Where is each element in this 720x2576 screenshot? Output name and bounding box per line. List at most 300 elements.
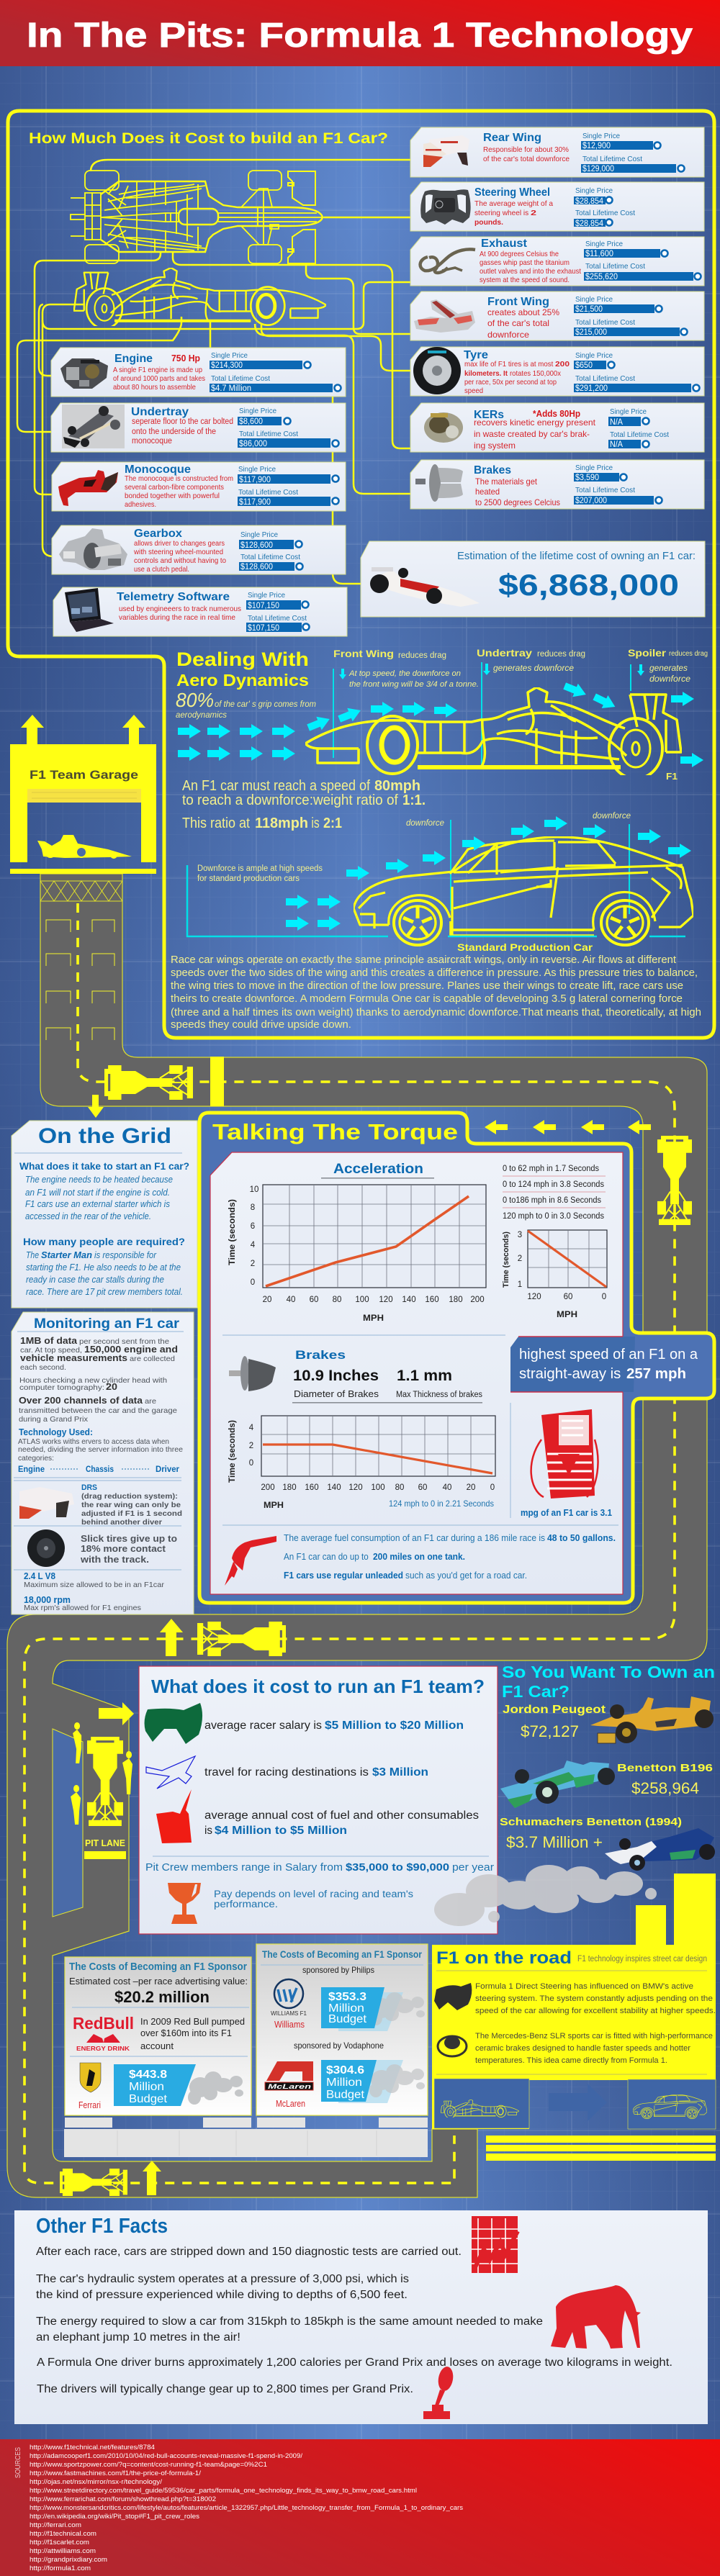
text: slick tires: Slick tires give up to — [81, 1534, 177, 1544]
chart: acceleration line chart: 4 — [251, 1241, 256, 1249]
diagram: standard production car — [354, 837, 693, 945]
icon: black steering wheel — [434, 1983, 472, 2010]
text: undertray description: monocoque — [132, 437, 172, 446]
car: Jordon Peugeot: $72,127 — [521, 1722, 579, 1740]
metric: telemetry prices: Single Price — [248, 591, 285, 600]
title banner: In The Pits: Formula 1 Technology — [27, 17, 693, 55]
chart: brakes line chart: 0 — [490, 1483, 495, 1492]
text: data channels: are — [145, 1397, 156, 1406]
chart: brakes line chart: 60 — [418, 1483, 427, 1492]
text: downforce ample: for standard production cars — [197, 875, 300, 883]
text: technology used: categories: — [18, 1454, 54, 1463]
metric: gearbox prices — [239, 530, 302, 571]
chart: brakes line chart: 180 — [282, 1483, 297, 1492]
panel: exhaust — [410, 237, 704, 286]
text: rear wing description: Responsible for about 30% — [483, 145, 569, 154]
chart: brakes line chart: Time (seconds) — [227, 1420, 237, 1483]
text: ceramic brakes — [475, 2032, 713, 2065]
text: tomography hours — [19, 1376, 167, 1392]
question: starting an F1 car: F1 cars use an external starter which is — [25, 1198, 170, 1209]
icon: green steering wheel — [145, 1703, 202, 1744]
text: brake specs: Diameter of Brakes — [294, 1388, 379, 1399]
figure: Williams budget: $353.3 — [328, 1991, 366, 2003]
list: source links: http://ojas.net/nsx/mirror/nsx-r/technology/ — [30, 2478, 162, 2485]
car: Schumachers Benetton — [500, 1816, 715, 1871]
figure: Ferrari budget: Million — [129, 2081, 164, 2093]
label: spoiler — [628, 648, 708, 684]
text: monocoque description — [125, 474, 233, 509]
label: sponsored by Philips: sponsored by Philips — [302, 1965, 374, 1975]
text: red bull spend: over $160m into its F1 — [140, 2028, 232, 2038]
metric: steering wheel prices — [574, 186, 635, 228]
metric: monocoque prices: $117,900 — [239, 498, 271, 507]
icon: laptop — [65, 588, 114, 632]
metric: telemetry prices — [246, 591, 310, 633]
callout: adds 80Hp: *Adds 80Hp — [533, 409, 580, 419]
text: wings paragraph: speeds over the two sides of the wing and this creates a difference in pressure. As this pressure tries to balance, — [171, 967, 698, 979]
icon: gear stick — [423, 2366, 455, 2419]
text: data volume: 1MB of data — [20, 1335, 78, 1346]
heading: so you want to own — [502, 1663, 715, 1701]
heading: so you want to own: F1 Car? — [502, 1682, 570, 1701]
text: engine description — [113, 366, 205, 392]
metric: front wing prices: $215,000 — [575, 328, 607, 337]
metric: undertray prices: Single Price — [239, 407, 276, 415]
metric: KERs prices: N/A — [610, 418, 623, 427]
decorative stripes — [486, 2136, 716, 2161]
heading: talking the torque: Talking The Torque — [212, 1119, 458, 1144]
logo: Ferrari: Ferrari — [78, 2100, 101, 2110]
callout: 750 Hp: 750 Hp — [171, 353, 200, 363]
heading: gearbox: Gearbox — [134, 528, 182, 540]
text: DRS: (drag reduction system): — [81, 1492, 178, 1501]
text: red bull spend: In 2009 Red Bull pumped — [140, 2016, 245, 2027]
labels: downforce: downforce — [593, 812, 631, 821]
road track — [7, 874, 707, 2197]
text: technology used: Driver — [156, 1464, 179, 1474]
metric: engine prices: $4.7 Million — [211, 384, 251, 393]
text: mpg: mpg of an F1 car is 3.1 — [521, 1507, 612, 1518]
text: fuel facts: An F1 car can do up to — [284, 1551, 371, 1562]
car: Schumachers Benetton: $3.7 Million + — [506, 1833, 603, 1851]
question: starting an F1 car — [19, 1160, 189, 1221]
panel: other F1 facts — [14, 2210, 708, 2424]
metric: engine prices: Total Lifetime Cost — [211, 374, 270, 383]
label: pit lane — [84, 1838, 126, 1859]
text: exhaust description: outlet valves and into the exhaust — [480, 267, 581, 276]
metric: monocoque prices: Total Lifetime Cost — [238, 488, 298, 497]
text: monocoque description: bonded together with powerful — [125, 492, 220, 500]
text: tomography hours: Hours checking a new cylinder head with — [19, 1376, 167, 1385]
icon: car on main straight — [104, 1065, 193, 1100]
text: gearbox description: use a clutch pedal. — [134, 565, 189, 574]
panel: monitoring an F1 car — [12, 1312, 194, 1614]
text: direct steering: Formula 1 Direct Steering has influenced on BMW's active — [475, 1982, 693, 1991]
panel: gearbox — [52, 525, 346, 574]
text: pay depends — [214, 1889, 413, 1910]
heading: tyre: Tyre — [464, 349, 488, 361]
text: undertray description — [132, 417, 233, 446]
text: telemetry description: variables during the race in real time — [119, 613, 235, 622]
label: front wing: the front wing will be 3/4 of a tonne. — [349, 680, 479, 689]
label: undertray: Undertray — [477, 648, 533, 659]
car: Benetton B196 — [500, 1761, 713, 1808]
text: 80 percent grip: aerodynamics — [176, 711, 227, 720]
fact: elephant jump — [36, 2315, 543, 2344]
chart: acceleration line chart: 100 — [355, 1296, 369, 1304]
chart: acceleration line chart: 200 — [470, 1296, 485, 1304]
metric: steering wheel prices: Total Lifetime Cost — [575, 209, 635, 217]
text: slick tires — [80, 1534, 177, 1565]
metric: undertray prices: $86,000 — [239, 440, 267, 448]
text: pay depends: performance. — [214, 1899, 278, 1910]
metric: telemetry prices: $107,150 — [248, 602, 279, 610]
chart: brakes line chart: 80 — [395, 1483, 404, 1492]
text: fuel cost: average annual cost of fuel and other consumables — [204, 1809, 479, 1822]
text: fuel facts — [284, 1532, 616, 1581]
text: ceramic brakes: temperatures. This idea came directly from Formula 1. — [475, 2056, 667, 2065]
logo: Ferrari — [78, 2063, 101, 2110]
label: sponsored by Vodaphone: sponsored by Vodaphone — [294, 2041, 384, 2051]
fact: diagnostic tests: After each race, cars are stripped down and 150 diagnostic tests are carried out. — [36, 2246, 462, 2258]
text: downforce ratio: 80mph — [374, 778, 420, 794]
chart: brakes line chart: 120 — [348, 1483, 363, 1492]
text: brakes description: heated — [475, 487, 500, 497]
icon: white and red F1 car — [370, 567, 480, 607]
text: monocoque description: adhesives. — [125, 500, 156, 509]
chart: brakes line chart: 40 — [443, 1483, 451, 1492]
icon: brake disc small — [229, 1356, 276, 1391]
chart: braking mini line chart: 120 — [527, 1293, 541, 1301]
metric: exhaust prices: Total Lifetime Cost — [585, 262, 645, 271]
arrows: airflow over production car — [286, 816, 691, 931]
text: estimate intro: Estimation of the lifetime cost of owning an F1 car: — [457, 551, 696, 562]
diagram: F1 car aero silhouette — [305, 687, 681, 779]
icon: fuel nozzle — [225, 1536, 276, 1586]
list: source links: http://www.sportzpower.com/?q=content/cost-running-f1-team&page=0%2C1 — [30, 2461, 267, 2468]
panel: KERs — [410, 403, 704, 452]
text: downforce ratio: An F1 car must reach a speed of — [182, 778, 374, 794]
question: people required: The — [26, 1249, 41, 1260]
text: racer salary: average racer salary is — [204, 1719, 322, 1732]
text: data volume: 150,000 engine and — [84, 1344, 178, 1355]
text: advertising value — [69, 1976, 248, 2006]
text: direct steering: steering system. The system constantly adjusts pending on the — [475, 1994, 713, 2003]
car: Jordon Peugeot — [503, 1696, 714, 1743]
label: undertray — [477, 648, 585, 673]
text: fuel cost: is — [204, 1825, 212, 1837]
text: racer salary — [204, 1719, 464, 1732]
metric: telemetry prices: $107,150 — [248, 624, 279, 633]
text: rear wing description: of the car's total downforce — [483, 155, 570, 163]
panel: steering wheel — [410, 182, 704, 231]
fact: hydraulic system — [36, 2273, 409, 2301]
chart: brakes line chart: 100 — [371, 1483, 385, 1492]
text: steering wheel description — [474, 199, 553, 227]
text: tomography hours: 20 — [106, 1381, 117, 1392]
text: data volume: are collected — [130, 1355, 175, 1363]
text: steering wheel description: The average weight of a — [474, 199, 553, 208]
text: pay depends: Pay depends on level of racing and team's — [214, 1889, 413, 1899]
icon: rear wing — [423, 135, 469, 167]
metric: exhaust prices — [584, 240, 701, 281]
icon: trophy — [168, 1883, 201, 1924]
list: source links: http://www.streetdirectory.com/travel_guide/59536/car_parts/formula_one_technology_finds_its_way_to_bmw_road_cars.html — [30, 2487, 417, 2494]
question: people required: is responsible for — [94, 1249, 157, 1260]
metric: undertray prices — [238, 407, 338, 448]
car: Schumachers Benetton: Schumachers Benetton (1994) — [500, 1816, 682, 1828]
panel: brakes — [410, 460, 704, 509]
text: downforce ratio: This ratio at — [182, 815, 253, 831]
chart: braking mini line chart: 3 — [518, 1231, 522, 1239]
heading: cost to build: How Much Does it Cost to build an F1 Car? — [29, 130, 388, 147]
logo: Williams — [271, 1979, 307, 2030]
question: people required — [23, 1236, 185, 1297]
figure: Williams budget: Million — [328, 2002, 364, 2015]
metric: steering wheel prices: $28,854 — [575, 197, 604, 206]
heading: garage: F1 Team Garage — [30, 769, 138, 782]
logo: Red Bull: ENERGY DRINK — [76, 2045, 130, 2052]
heading: F1 on the road — [436, 1948, 707, 1968]
text: direct steering — [475, 1982, 716, 2015]
list: acceleration figures: 0 to 62 mph in 1.7 Seconds — [503, 1165, 599, 1173]
question: people required: How many people are required? — [23, 1236, 185, 1247]
heading: telemetry software: Telemetry Software — [117, 591, 230, 603]
text: steering wheel description: 2 — [531, 209, 536, 217]
metric: brakes prices: Total Lifetime Cost — [575, 486, 635, 494]
metric: rear wing prices: $129,000 — [582, 165, 614, 173]
list: source links: http://adamcooperf1.com/2010/10/04/red-bull-accounts-reveal-massive-f1-spend-in-2009/ — [30, 2452, 302, 2459]
text: downforce ratio — [182, 778, 426, 831]
text: red bull spend — [140, 2016, 245, 2051]
fact: elephant jump: an elephant jump 10 metres in the air! — [36, 2331, 240, 2344]
panel: F1 on the road — [434, 1948, 716, 2129]
question: starting an F1 car: an F1 will not start if the engine is cold. — [25, 1187, 170, 1198]
text: engine limits: 2.4 L V8 — [24, 1571, 55, 1581]
blueprint: F1 car side view — [74, 268, 326, 328]
heading: monocoque: Monocoque — [125, 464, 191, 476]
text: 80 percent grip — [176, 689, 316, 720]
metric: gearbox prices: Total Lifetime Cost — [240, 553, 300, 561]
chart: acceleration line chart: 10 — [250, 1185, 258, 1194]
arrow: down to grid — [88, 1095, 104, 1118]
text: DRS: adjusted if F1 is 1 second — [81, 1509, 182, 1518]
text: telemetry description: used by engineeers to track numerous — [119, 605, 241, 613]
text: front wing description: creates about 25% — [487, 307, 559, 317]
metric: brakes prices — [574, 464, 662, 505]
metric: KERs prices: Single Price — [610, 407, 647, 416]
text: data channels — [19, 1395, 177, 1424]
list: source links: http://ferrari.com — [30, 2521, 81, 2528]
icon: up arrows — [21, 715, 145, 744]
chart: acceleration line chart: Time (seconds) — [227, 1199, 237, 1265]
chart: acceleration line chart: 180 — [449, 1296, 463, 1304]
logo: Williams: WILLIAMS F1 — [271, 2010, 307, 2017]
icon: blue plane — [146, 1756, 195, 1789]
metric: KERs prices: N/A — [610, 440, 623, 449]
chart: brakes line chart: MPH — [264, 1500, 284, 1510]
text: downforce ratio: 2:1 — [323, 815, 342, 831]
chart: acceleration line chart: 8 — [251, 1203, 255, 1212]
text: telemetry description — [119, 605, 241, 622]
text: KERs description: ing system — [474, 440, 516, 451]
text: fuel facts: such as you'd get for a road car. — [405, 1570, 527, 1581]
chart: acceleration line chart: 2 — [251, 1260, 255, 1268]
panel: highest speed callout: straight-away is — [519, 1366, 625, 1382]
figure: McLaren budget: Budget — [326, 2089, 365, 2101]
metric: tyre prices — [574, 351, 700, 393]
text: gearbox description: allows driver to changes gears — [134, 539, 225, 548]
list: acceleration figures: 120 mph to 0 in 3.0 Seconds — [503, 1212, 604, 1221]
text: exhaust description: At 900 degrees Celsius the — [480, 250, 559, 258]
heading: team cost: What does it cost to run an F1 team? — [151, 1676, 485, 1697]
heading: other facts: Other F1 Facts — [36, 2215, 168, 2238]
metric: front wing prices — [574, 295, 687, 337]
text: fuel cost — [204, 1809, 479, 1837]
car: Benetton B196: Benetton B196 — [617, 1762, 713, 1774]
label: undertray: generates downforce — [493, 664, 574, 673]
metric: undertray prices: $8,600 — [239, 417, 263, 426]
text: ceramic brakes: ceramic brakes designed to handle faster speeds and hotter — [475, 2044, 690, 2053]
text: racer salary: $5 Million to $20 Million — [325, 1719, 464, 1732]
panel: cost to run a team — [139, 1666, 498, 1934]
heading: engine: Engine — [114, 353, 153, 365]
fact: elephant jump: The energy required to slow a car from 315kph to 185kph is the same amount needed to make — [36, 2315, 543, 2328]
metric: exhaust prices: Single Price — [585, 240, 623, 248]
text: gearbox description — [133, 539, 226, 574]
text: wings paragraph: (three and a half times its own weight) thanks to aerodynamic downforce.That means that, theoretically, at high — [171, 1006, 701, 1018]
text: wings paragraph: Race car wings operate on exactly the same principle asaircraft wings, only in reverse. Air flows at different — [171, 954, 677, 966]
list: acceleration figures — [503, 1165, 606, 1221]
list: source links: http://f1scarlet.com — [30, 2539, 89, 2546]
label: front wing: Front Wing — [333, 648, 394, 659]
metric: steering wheel prices: Single Price — [575, 186, 613, 195]
footer sources — [0, 2439, 720, 2576]
text: data channels: transmitted between the car and the garage — [19, 1406, 177, 1415]
text: pit crew salary: per year — [452, 1862, 494, 1874]
panel: front wing — [410, 292, 704, 340]
chart: braking mini line chart: Time (seconds) — [502, 1231, 510, 1288]
text: red bull spend: account — [140, 2041, 174, 2051]
heading: so you want to own: So You Want To Own an — [502, 1663, 715, 1681]
text: travel cost: $3 Million — [372, 1766, 428, 1779]
figure: Ferrari budget: $443.8 — [129, 2069, 167, 2081]
leader lines from car to parts — [17, 160, 410, 584]
text: advertising value: Estimated cost –per race advertising value: — [69, 1976, 248, 1987]
text: downforce ample: Downforce is ample at high speeds — [197, 864, 323, 873]
car: Jordon Peugeot: Jordon Peugeot — [503, 1704, 606, 1716]
icon: red fuel can — [156, 1789, 192, 1843]
text: DRS — [81, 1483, 182, 1527]
chart: acceleration line chart: 120 — [379, 1296, 393, 1304]
labels: downforce — [406, 812, 631, 828]
text: brake specs: Brakes — [295, 1348, 346, 1362]
list: source links: http://formula1.com — [30, 2564, 91, 2572]
text: downforce ample — [197, 864, 323, 883]
icon: brake disc — [415, 464, 463, 502]
text: downforce ratio: 1:1. — [402, 792, 426, 808]
text: data channels: Over 200 channels of data — [19, 1395, 143, 1406]
icon: monocoque — [58, 470, 118, 506]
metric: exhaust prices: $11,600 — [585, 250, 613, 258]
text: direct steering: speed of the car allowing for excellent stability at higher speeds. — [475, 2007, 716, 2015]
chart: brakes line chart: 160 — [305, 1483, 319, 1492]
panel: engine — [51, 348, 346, 397]
text: engine limits: Maximum size allowed to be in an F1car — [24, 1581, 165, 1589]
text: KERs description — [474, 417, 596, 451]
metric: rear wing prices: $12,900 — [582, 142, 611, 150]
metric: tyre prices: Single Price — [575, 351, 613, 360]
text: fuel cost: $4 Million to $5 Million — [215, 1825, 347, 1837]
icon: DRS rear wing — [19, 1487, 74, 1519]
text: data channels: during a Grand Prix — [19, 1415, 89, 1424]
text: KERs description: in waste created by car's brak- — [474, 429, 590, 439]
yellow frame: cost and aero section — [8, 111, 714, 1038]
metric: gearbox prices: Single Price — [240, 530, 278, 539]
heading: front wing: Front Wing — [487, 296, 549, 308]
chart: cyan airflow guide lines — [333, 662, 631, 914]
metric: undertray prices: Total Lifetime Cost — [239, 430, 298, 438]
text: monocoque description: The monocoque is constructed from — [125, 474, 233, 483]
text: wings paragraph: the wing tries to move in the direction of the low pressure. Planes use their wings to create lift, race cars use — [171, 980, 683, 992]
metric: exhaust prices: $255,620 — [585, 273, 618, 281]
panel: lifetime cost estimate — [361, 541, 705, 617]
fact: gear changes: The drivers will typically change gear up to 2,800 times per Grand Prix. — [37, 2383, 413, 2395]
figure: McLaren budget: Million — [326, 2076, 362, 2089]
label: spoiler: downforce — [649, 675, 690, 684]
icon: engine — [60, 358, 108, 389]
icon: car in pit lane — [87, 1737, 123, 1826]
list: source links: http://grandprixdiary.com — [30, 2556, 107, 2563]
text: tyre description: per race, 50x per second at top — [464, 378, 557, 387]
text: technology used: Engine — [18, 1464, 45, 1474]
text: brake specs: Max Thickness of brakes — [396, 1391, 482, 1399]
metric: monocoque prices — [238, 465, 338, 507]
text: travel cost — [204, 1766, 428, 1779]
panel: rear wing — [410, 127, 704, 177]
heading: acceleration: Acceleration — [333, 1162, 423, 1177]
text: exhaust description: system at the speed of sound. — [480, 276, 570, 284]
text: technology used — [18, 1427, 183, 1474]
icon: red fuel pump — [531, 1409, 598, 1499]
heading: sponsor left: The Costs of Becoming an F1 Sponsor — [69, 1961, 247, 1973]
text: brake specs: 1.1 mm — [397, 1368, 452, 1384]
text: data volume: per second sent from the — [79, 1337, 169, 1346]
chart: acceleration line chart: 60 — [310, 1296, 318, 1304]
heading: dealing with aero dynamics — [176, 648, 309, 690]
list: source links: http://www.ferrarichat.com/forum/showthread.php?t=318002 — [30, 2495, 216, 2503]
text: wings paragraph: speeds they could drive upside down. — [171, 1018, 351, 1031]
icon: undertray — [62, 405, 125, 448]
arrow: F1 to road car — [549, 2084, 607, 2121]
icons: pit crew silhouettes — [71, 1722, 132, 1825]
icon: steering wheel — [420, 189, 471, 225]
text: tyre description — [464, 360, 570, 395]
label: undertray: reduces drag — [537, 650, 585, 659]
text: front wing description: of the car's total — [487, 318, 549, 328]
text: wings paragraph: theirs to create downforce. A modern Formula One car is capable of developing 3.5 g lateral cornering force — [171, 993, 683, 1005]
icon: gearbox — [59, 528, 127, 570]
metric: tyre prices: Total Lifetime Cost — [575, 374, 635, 383]
chart: brakes line chart: 20 — [467, 1483, 475, 1492]
chart: brakes line chart: 140 — [327, 1483, 341, 1492]
icon: black brake — [438, 2036, 467, 2056]
label: spoiler: Spoiler — [628, 648, 667, 659]
label: spoiler: generates — [649, 664, 688, 673]
heading: undertray: Undertray — [131, 406, 189, 418]
panel: undertray — [51, 403, 346, 452]
list: acceleration figures: 0 to 124 mph in 3.8 Seconds — [503, 1180, 604, 1189]
